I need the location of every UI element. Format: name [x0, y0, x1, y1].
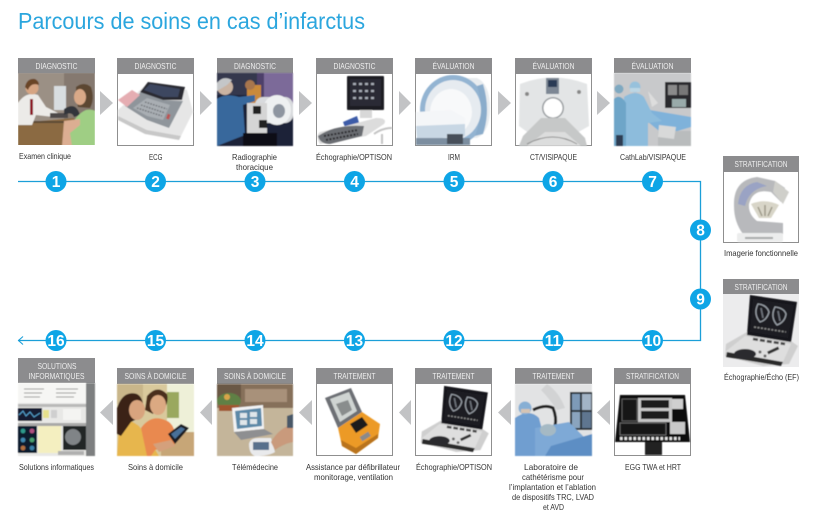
arrow 13 to 14: [299, 400, 312, 425]
image: CT scanner: [519, 78, 589, 146]
image: ultrasound system: [318, 76, 392, 144]
step 4 badge: 4: [350, 174, 359, 191]
step 2 badge: [145, 171, 166, 192]
label: Télémédecine: [232, 463, 278, 472]
arrow 5 to 6: [498, 91, 511, 115]
card 15: home care: SOINS À DOMICILE: [124, 371, 187, 381]
card 14: telemedicine: [217, 368, 293, 472]
image: clinical exam: [18, 73, 95, 146]
card 4: echography: DIAGNOSTIC: [334, 61, 376, 71]
step 13 badge: 13: [346, 333, 363, 350]
step 16 badge: [46, 330, 66, 351]
arrow 11 to 12: [498, 400, 511, 425]
label: CT/VISIPAQUE: [530, 153, 577, 162]
card 16: IT solutions: [18, 358, 95, 472]
step 10 badge: 10: [644, 333, 661, 350]
card 6: CT: ÉVALUATION: [532, 61, 574, 71]
image: radiography room: [217, 73, 293, 146]
step 12 badge: 12: [445, 333, 463, 350]
card 13: defibrillator: TRAITEMENT: [334, 371, 376, 381]
image: laptop and blood pressure monitor: [217, 384, 293, 456]
label: thoracique: [236, 163, 273, 172]
step 6 badge: 6: [549, 174, 558, 191]
card 7: cath lab: [614, 58, 691, 162]
timeline path: [18, 182, 700, 344]
label: cathétérisme pour: [522, 473, 584, 482]
label: CathLab/VISIPAQUE: [620, 153, 686, 162]
step 2 badge: 2: [151, 174, 160, 191]
arrow 4 to 5: [399, 91, 411, 115]
label: Échographie/Écho (EF): [724, 372, 799, 382]
image: portable ultrasound: [421, 386, 489, 452]
step 5 badge: 5: [450, 174, 459, 191]
label: [509, 463, 596, 512]
card 11: cath lab implantation: TRAITEMENT: [532, 371, 575, 381]
step 6 badge: [542, 171, 564, 192]
step 4 badge: [344, 171, 365, 192]
label: Assistance par défibrillateur: [306, 463, 400, 472]
label: Échographie/OPTISON: [416, 462, 492, 472]
step 11 badge: 11: [545, 333, 562, 350]
card 12: echography: [415, 368, 492, 472]
image: defibrillator: [325, 388, 380, 454]
label: Laboratoire de: [524, 463, 578, 472]
label: [306, 463, 400, 482]
card 16: IT solutions: INFORMATIQUES: [28, 371, 85, 381]
step 8 badge: [690, 220, 711, 240]
step 8 badge: 8: [696, 222, 705, 240]
arrow 10 to 11: [597, 400, 610, 425]
card 8: functional imaging: [723, 156, 799, 258]
card 16: IT solutions: SOLUTIONS: [38, 361, 77, 371]
step 7 badge: 7: [648, 174, 657, 191]
step 5 badge: [444, 171, 464, 192]
image: software screenshot: [18, 383, 95, 456]
card 2: ECG: [117, 58, 194, 162]
label: Radiographie: [232, 153, 277, 162]
card 6: CT: [515, 58, 592, 162]
card 12: echography: TRAITEMENT: [432, 371, 475, 381]
card 5: MRI: ÉVALUATION: [432, 61, 474, 71]
label: l’implantation et l’ablation: [509, 483, 596, 492]
step 1 badge: [46, 171, 66, 192]
step 16 badge: 16: [47, 333, 65, 350]
label: Solutions informatiques: [19, 463, 94, 472]
card 10: EGG TWA: [614, 368, 691, 472]
arrow 6 to 7: [597, 91, 610, 115]
card 1: diagnostic: DIAGNOSTIC: [36, 61, 78, 71]
label: [232, 153, 277, 172]
card 3: chest radiography: [217, 58, 293, 172]
image: two women with tablet: [117, 384, 194, 456]
card 11: cath lab implantation: [509, 368, 596, 512]
card 5: MRI: [415, 58, 492, 162]
arrow 1 to 2: [100, 91, 113, 115]
step 10 badge: [642, 330, 663, 351]
arrow 3 to 4: [299, 91, 312, 115]
card 14: telemedicine: SOINS À DOMICILE: [224, 371, 286, 381]
step 15 badge: [145, 330, 166, 351]
title: Parcours de soins en cas d’infarctus: [18, 8, 365, 34]
step 3 badge: [244, 171, 266, 192]
step 14 badge: 14: [246, 333, 264, 350]
arrow 2 to 3: [200, 91, 212, 115]
label: et AVD: [543, 503, 564, 512]
image: portable ultrasound: [723, 294, 799, 367]
step 9 badge: 9: [696, 292, 705, 308]
card 9: echography EF: STRATIFICATION: [734, 282, 788, 292]
step 9 badge: [690, 288, 711, 310]
card 2: ECG: DIAGNOSTIC: [134, 61, 176, 71]
step 7 badge: [642, 171, 663, 192]
label: ECG: [149, 153, 162, 162]
image: operating room: [515, 384, 592, 456]
card 13: defibrillator: [306, 368, 400, 482]
image: cath lab room: [614, 73, 691, 146]
label: IRM: [448, 153, 460, 162]
label: Soins à domicile: [128, 463, 183, 472]
step 12 badge: [444, 330, 464, 351]
step 3 badge: 3: [251, 174, 260, 191]
label: monitorage, ventilation: [314, 473, 393, 482]
step 13 badge: [344, 330, 365, 351]
step 11 badge: [542, 330, 564, 351]
card 1: diagnostic: [18, 58, 95, 161]
arrow 15 to 16: [100, 400, 113, 425]
label: EGG TWA et HRT: [625, 463, 681, 472]
image: nuclear camera: [734, 177, 789, 242]
label: Imagerie fonctionnelle: [724, 249, 798, 258]
label: Échographie/OPTISON: [316, 152, 392, 162]
step 15 badge: 15: [147, 333, 164, 350]
label: Examen clinique: [19, 152, 71, 161]
label: de dispositifs TRC, LVAD: [512, 493, 594, 502]
step 1 badge: 1: [52, 174, 61, 191]
step 14 badge: [244, 330, 266, 351]
card 9: echography EF: [723, 279, 799, 382]
arrow 14 to 15: [200, 400, 212, 425]
image: MRI scanner: [416, 75, 490, 145]
image: monitor: [615, 395, 690, 455]
card 3: chest radiography: DIAGNOSTIC: [234, 61, 276, 71]
image: ECG device: [118, 82, 193, 140]
card 10: EGG TWA: STRATIFICATION: [626, 371, 679, 381]
card 15: home care: [117, 368, 194, 472]
card 8: functional imaging: STRATIFICATION: [734, 159, 788, 169]
arrow 12 to 13: [399, 400, 411, 425]
card 7: cath lab: ÉVALUATION: [632, 61, 674, 71]
card 4: echography: [316, 58, 393, 162]
